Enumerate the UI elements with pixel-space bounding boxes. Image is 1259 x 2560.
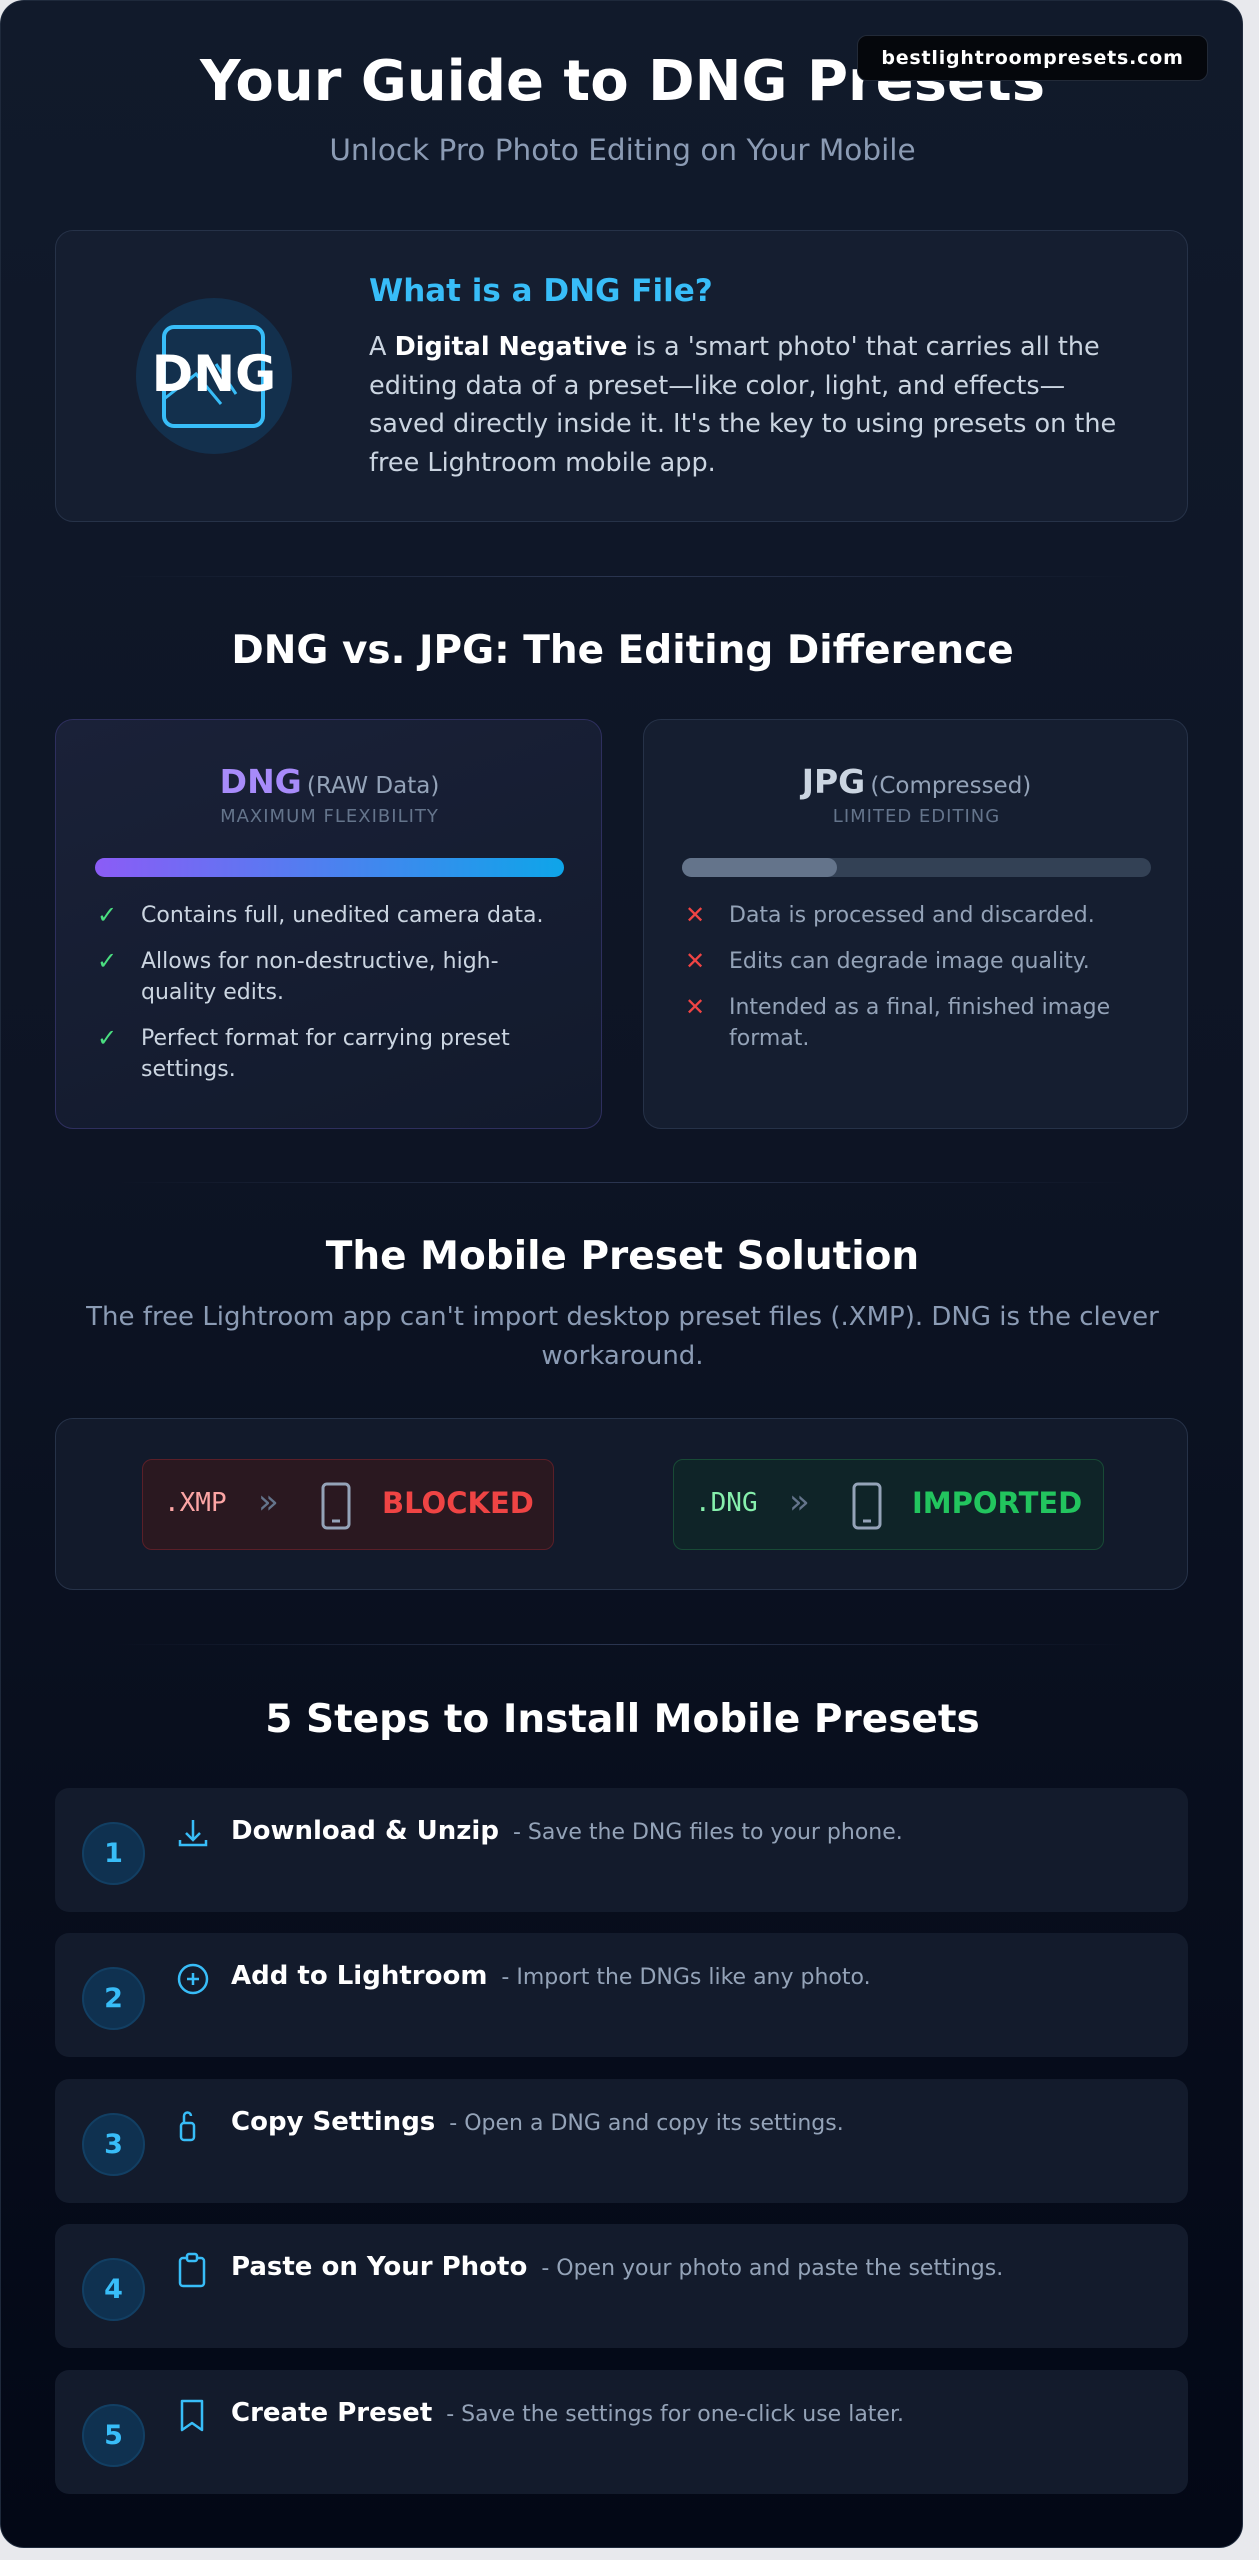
panel: JPG: ✕	[685, 947, 705, 975]
imported flow: IMPORTED	[912, 1486, 1082, 1520]
blocked flow: .XMP	[164, 1488, 227, 1518]
panel: DNG	[55, 719, 602, 1129]
blocked flow: BLOCKED	[382, 1486, 534, 1520]
step 1: Download & Unzip - Save the DNG files to your phone.	[231, 1816, 903, 1846]
imported flow	[673, 1459, 1104, 1550]
paragraph: The free Lightroom app can't import desktop preset files (.XMP). DNG is the clever workaround.	[86, 1302, 1159, 1371]
subtitle: Unlock Pro Photo Editing on Your Mobile	[329, 133, 916, 167]
bar	[682, 858, 1151, 877]
icon: DNG	[136, 298, 292, 454]
panel: JPG: Intended as a final, finished image format.	[729, 995, 1110, 1051]
panel: flow	[55, 1418, 1188, 1590]
panel: DNG: ✓	[97, 1024, 117, 1052]
list	[97, 901, 544, 1082]
step 4: 4	[104, 2274, 123, 2305]
panel: DNG: ✓	[97, 901, 117, 929]
panel: DNG: Contains full, unedited camera data.	[141, 903, 544, 928]
icon: DNG: DNG	[152, 345, 276, 403]
step 5: 5	[104, 2420, 123, 2451]
heading: mobile solution: The Mobile Preset Solution	[326, 1234, 919, 1279]
step 3: Copy Settings - Open a DNG and copy its settings.	[231, 2107, 844, 2137]
step 3	[55, 2079, 1188, 2203]
heading: DNG vs JPG: DNG vs. JPG: The Editing Difference	[231, 628, 1014, 673]
blocked flow: »	[258, 1482, 279, 1522]
step 2: 2	[104, 1983, 123, 2014]
title: Your Guide to DNG Presets	[200, 49, 1045, 114]
step 4: Paste on Your Photo - Open your photo and paste the settings.	[231, 2252, 1003, 2282]
step 4	[55, 2224, 1188, 2348]
heading: What is a DNG File?	[369, 273, 713, 309]
imported flow: »	[789, 1482, 810, 1522]
step 2	[55, 1933, 1188, 2057]
DNG label: DNG (RAW Data)	[220, 762, 439, 801]
panel: DNG: MAXIMUM FLEXIBILITY	[220, 806, 439, 827]
bar	[95, 858, 564, 877]
step 2: Add to Lightroom - Import the DNGs like any photo.	[231, 1961, 871, 1991]
blocked flow	[142, 1459, 554, 1550]
step 5	[55, 2370, 1188, 2494]
panel: JPG: Data is processed and discarded.	[729, 903, 1095, 928]
panel: DNG: Perfect format for carrying preset settings.	[141, 1026, 510, 1082]
panel: DNG: Allows for non-destructive, high-quality edits.	[141, 949, 499, 1005]
panel: JPG: Edits can degrade image quality.	[729, 949, 1090, 974]
step 3: 3	[104, 2129, 123, 2160]
badge: website: bestlightroompresets.com	[881, 47, 1184, 69]
panel: JPG: JPG (Compressed)	[802, 762, 1031, 801]
step 1: 1	[104, 1838, 123, 1869]
panel: DNG: ✓	[97, 947, 117, 975]
panel: JPG	[643, 719, 1188, 1129]
step 5: Create Preset - Save the settings for one-click use later.	[231, 2398, 904, 2428]
panel: JPG: ✕	[685, 901, 705, 929]
badge: website	[857, 35, 1208, 81]
panel: JPG: LIMITED EDITING	[833, 806, 1000, 827]
heading: steps: 5 Steps to Install Mobile Presets	[265, 1697, 980, 1742]
panel: what is DNG	[55, 230, 1188, 522]
step 1	[55, 1788, 1188, 1912]
panel: JPG: ✕	[685, 993, 705, 1021]
imported flow: .DNG	[695, 1488, 758, 1518]
body text: A Digital Negative is a 'smart photo' that carries all the editing data of a preset—like color, light, and effects—saved directly inside it. It's the key to using presets on the free Lightroom mobile app.	[369, 332, 1116, 478]
